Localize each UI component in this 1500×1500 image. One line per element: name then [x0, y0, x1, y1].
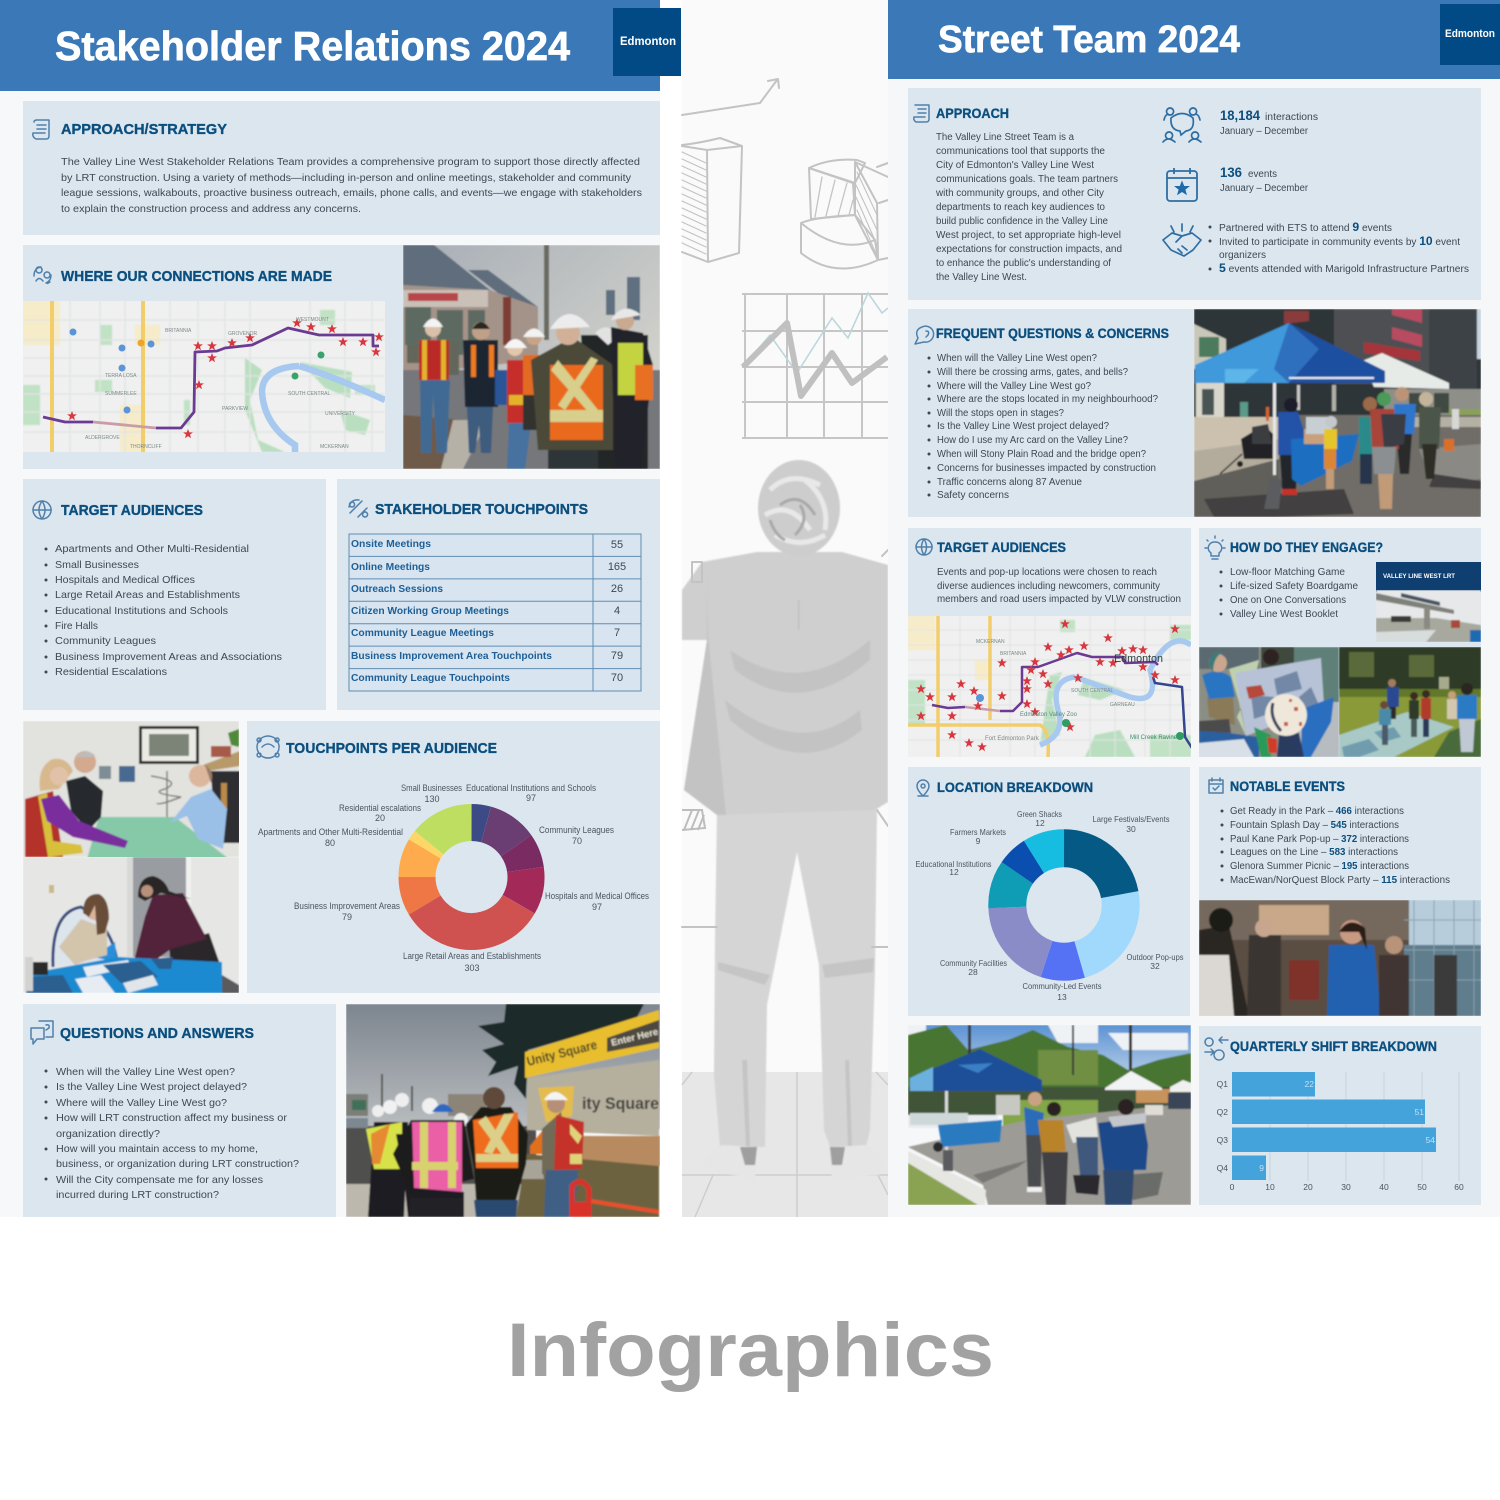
heading: QUARTERLY SHIFT BREAKDOWN — [1230, 1038, 1437, 1054]
donut labels: Community Leagues — [539, 825, 614, 835]
questions list: Traffic concerns along 87 Avenue — [937, 477, 1082, 488]
question list: Will the City compensate me for any losses — [56, 1174, 263, 1186]
hair — [758, 460, 840, 556]
tent canopy — [1195, 323, 1289, 383]
table: Community League Touchpoints — [351, 672, 510, 684]
stat: events — [1220, 164, 1309, 194]
approach text: with community groups, and other City — [935, 188, 1104, 199]
icon: document — [33, 120, 49, 139]
donut labels: 32 — [1150, 961, 1160, 971]
donut labels: 30 — [1126, 824, 1136, 834]
donut labels: 13 — [1057, 992, 1067, 1002]
icon: calendar star — [1167, 168, 1197, 201]
engagement list: One on One Conversations — [1230, 595, 1346, 606]
photo: crew in hard hats on sidewalk — [403, 245, 660, 469]
map: event locations: Mill Creek Ravine — [1130, 735, 1178, 741]
approach text: to enhance the public's understanding of — [936, 258, 1111, 269]
table: Citizen Working Group Meetings — [351, 605, 509, 617]
businessman seen from behind — [682, 460, 888, 1180]
panel: touchpoints per audience — [247, 721, 660, 993]
photo: crew at Unity Square: Unity Square — [525, 1037, 599, 1069]
audience list: Fire Halls — [55, 620, 98, 632]
donut labels: Community Facilities — [940, 958, 1007, 968]
map: event locations: GARNEAU — [1110, 702, 1135, 708]
questions list: Where are the stops located in my neighbourhood? — [937, 394, 1158, 405]
sketch: rising arrow — [682, 79, 779, 115]
stroller — [1241, 425, 1273, 459]
bar chart: shifts per quarter: 30 — [1341, 1182, 1351, 1192]
events list: Fountain Splash Day – 545 interactions — [1230, 820, 1399, 831]
body text: to explain the construction process and address any concerns. — [61, 203, 361, 215]
icon: speech bubble — [915, 326, 934, 344]
table: Community League Meetings — [351, 627, 494, 639]
bar chart: shifts per quarter: 10 — [1265, 1182, 1275, 1192]
donut labels: 20 — [375, 813, 385, 823]
map: stakeholder connections: UNIVERSITY — [325, 411, 356, 417]
icon: calendar check — [1209, 778, 1223, 793]
approach text: City of Edmonton's Valley Line West — [936, 160, 1094, 171]
table: 55 — [611, 539, 623, 551]
body text: by LRT construction. Using a variety of methods—including in-person and online meetings, stakeholder and community — [61, 172, 632, 184]
donut labels: Small Businesses — [401, 783, 462, 793]
sketch: 3D bar — [682, 138, 742, 262]
heading: QUESTIONS AND ANSWERS — [60, 1025, 254, 1042]
approach text — [935, 132, 1122, 283]
partnership bullets: 5 events attended with Marigold Infrastructure Partners — [1219, 261, 1469, 275]
icon: handshake circle — [257, 736, 279, 758]
map: stakeholder connections: THORNCLIFF — [130, 444, 162, 450]
donut labels: Farmers Markets — [950, 827, 1006, 837]
bar chart: shifts per quarter: 22 — [1305, 1079, 1314, 1089]
donut labels: 97 — [526, 793, 536, 803]
engagement list: Low-floor Matching Game — [1230, 567, 1345, 578]
donut labels: 130 — [424, 794, 440, 804]
donut labels: 80 — [325, 838, 335, 848]
question list: Is the Valley Line West project delayed? — [56, 1081, 247, 1093]
icon: shift rotation — [1205, 1037, 1228, 1060]
bar chart: shifts per quarter: 50 — [1417, 1182, 1427, 1192]
left infographic background — [0, 91, 660, 1217]
photo: outdoor event with tent and stroller — [908, 1025, 1191, 1205]
panel: approach / strategy — [23, 101, 660, 235]
blue table — [1291, 434, 1359, 486]
map: stakeholder connections: MCKERNAN — [320, 444, 349, 450]
questions list: Where will the Valley Line West go? — [937, 381, 1091, 392]
table: 79 — [611, 650, 623, 662]
questions list: When will the Valley Line West open? — [937, 353, 1097, 364]
question list: How will you maintain access to my home, — [56, 1143, 258, 1155]
questions list: Safety concerns — [937, 490, 1009, 501]
questions list — [929, 353, 1158, 501]
stat: events: 136 — [1220, 164, 1242, 180]
stat: interactions — [1220, 107, 1318, 137]
panel: target audiences — [23, 479, 326, 710]
body text: The Valley Line West Stakeholder Relations Team provides a comprehensive program to support those directly affected — [61, 156, 640, 168]
map: event locations — [908, 616, 1192, 757]
header: Stakeholder Relations — [0, 0, 660, 91]
body text — [61, 156, 642, 215]
heading: TARGET AUDIENCES — [937, 539, 1066, 555]
map: stakeholder connections: ALDERGROVE — [85, 435, 120, 441]
map: stakeholder connections: BRITANNIA — [165, 328, 192, 334]
map: stakeholder connections: SUMMERLEE — [105, 391, 137, 397]
donut labels — [258, 783, 649, 973]
table: 26 — [611, 583, 623, 595]
question list: business, or organization during LRT construction? — [56, 1158, 299, 1170]
heading: HOW DO THEY ENGAGE? — [1230, 539, 1383, 555]
questions list: Will the stops open in stages? — [937, 408, 1064, 419]
description: members and road users impacted by VLW construction — [937, 594, 1181, 605]
right infographic background — [888, 79, 1500, 1217]
photo: consultation at blue table — [23, 857, 239, 993]
map: event locations: Edmonton — [1114, 653, 1163, 665]
donut labels: Educational Institutions — [916, 859, 992, 869]
panel: stakeholder touchpoints — [337, 479, 660, 710]
table: 4 — [614, 605, 620, 617]
donut labels: 12 — [949, 867, 959, 877]
heading: APPROACH/STRATEGY — [61, 121, 227, 138]
title: Street Team 2024: Street Team 2024 — [938, 19, 1240, 61]
panel: quarterly shift breakdown — [1199, 1026, 1481, 1205]
audience list: Large Retail Areas and Establishments — [55, 589, 240, 601]
map: event locations: SOUTH CENTRAL — [1071, 688, 1113, 694]
engagement list — [1221, 567, 1358, 620]
photo: safety matching game — [1199, 647, 1339, 757]
panel: frequent questions and concerns — [908, 309, 1194, 517]
panel: notable events — [1199, 767, 1481, 1016]
booklet cover: VALLEY LINE WEST LRT — [1383, 573, 1455, 580]
donut labels: 12 — [1035, 818, 1045, 828]
approach text: build public confidence in the Valley Line — [936, 216, 1108, 227]
map: stakeholder connections: SOUTH CENTRAL — [288, 391, 330, 397]
photo: event attendees with street team — [1199, 900, 1481, 1016]
heading: FREQUENT QUESTIONS & CONCERNS — [936, 325, 1169, 341]
bar chart: shifts per quarter: 51 — [1415, 1107, 1424, 1117]
bar chart: shifts per quarter: 0 — [1230, 1182, 1235, 1192]
bar chart: shifts per quarter: Q4 — [1217, 1163, 1228, 1173]
donut labels: Hospitals and Medical Offices — [545, 891, 649, 901]
jacket — [682, 552, 888, 815]
table: Outreach Sessions — [351, 583, 443, 595]
table: Business Improvement Area Touchpoints — [351, 650, 552, 662]
icon: globe with people — [916, 539, 932, 555]
approach text: communications tool that supports the — [936, 146, 1105, 157]
questions list: Will there be crossing arms, gates, and bells? — [937, 367, 1128, 378]
heading: NOTABLE EVENTS — [1230, 778, 1345, 794]
bar chart: shifts per quarter: 20 — [1303, 1182, 1313, 1192]
table: 165 — [608, 561, 626, 573]
table: 70 — [611, 672, 623, 684]
header: Street Team — [888, 0, 1500, 79]
table: 7 — [614, 627, 620, 639]
bar chart: shifts per quarter: 54 — [1426, 1135, 1435, 1145]
heading: LOCATION BREAKDOWN — [937, 779, 1093, 795]
logo: Edmonton (left) — [613, 8, 681, 76]
audience list: Apartments and Other Multi-Residential — [55, 543, 249, 555]
stat: interactions: interactions — [1265, 112, 1318, 123]
logo: Edmonton (right) — [1440, 4, 1500, 65]
donut labels: 70 — [572, 836, 582, 846]
icon: connected people — [34, 267, 51, 284]
sketch fragments around figure — [682, 550, 888, 947]
map: event locations: BRITANNIA — [1000, 651, 1027, 657]
events list: Glenora Summer Picnic – 195 interactions — [1230, 861, 1409, 872]
trousers — [714, 810, 877, 1147]
bar chart: shifts per quarter: 9 — [1259, 1163, 1264, 1173]
donut labels: Educational Institutions and Schools — [466, 783, 596, 793]
photo: crew at Unity Square: Enter Here — [610, 1027, 659, 1049]
sketch: line graph on grid — [742, 293, 888, 438]
heading: STAKEHOLDER TOUCHPOINTS — [375, 501, 588, 518]
icon: handshake — [1163, 224, 1201, 256]
shoes — [702, 1145, 757, 1180]
questions list: Is the Valley Line West project delayed? — [937, 421, 1109, 432]
partnership bullets: Partnered with ETS to attend 9 events — [1219, 220, 1392, 234]
icon: handshake nodes — [349, 500, 368, 517]
map: event locations: MCKERNAN — [976, 639, 1005, 645]
audience list: Hospitals and Medical Offices — [55, 574, 195, 586]
photo: crew at Unity Square — [346, 1004, 660, 1217]
events list: Paul Kane Park Pop-up – 372 interactions — [1230, 834, 1409, 845]
donut labels: 79 — [342, 912, 352, 922]
donut labels — [916, 809, 1184, 1002]
logo: Edmonton (left): Edmonton — [620, 34, 676, 48]
stat: events: events — [1248, 169, 1277, 180]
donut chart: location breakdown — [985, 826, 1143, 984]
photo: street team blue tent — [1194, 309, 1481, 517]
icon: people network — [1163, 108, 1201, 142]
partnership bullets: Invited to participate in community events by 10 event — [1219, 234, 1460, 248]
bar chart: shifts per quarter: 60 — [1454, 1182, 1464, 1192]
bar chart: shifts per quarter: Q2 — [1217, 1107, 1228, 1117]
approach text: The Valley Line Street Team is a — [936, 132, 1074, 143]
panel: street team approach — [908, 88, 1481, 300]
icon: document — [914, 105, 929, 122]
map: stakeholder connections: PARKVIEW — [222, 406, 248, 412]
question list: How will LRT construction affect my business or — [56, 1112, 288, 1124]
question list: When will the Valley Line West open? — [56, 1066, 235, 1078]
table: Online Meetings — [351, 561, 430, 573]
audience list: Business Improvement Areas and Associations — [55, 651, 282, 663]
donut chart: touchpoints per audience — [395, 800, 548, 954]
table — [349, 534, 641, 691]
events list: Leagues on the Line – 583 interactions — [1230, 847, 1398, 858]
sketch: hatched block — [682, 810, 705, 830]
panel: target audiences (street team) — [908, 528, 1192, 757]
approach text: communications goals. The team partners — [936, 174, 1118, 185]
sketch: 3D pie chart — [801, 160, 888, 269]
description: diverse audiences including newcomers, community — [937, 581, 1160, 592]
approach text: the Valley Line West. — [936, 272, 1027, 283]
child — [1324, 429, 1337, 449]
photo: life-sized safety boardgame — [1339, 647, 1481, 757]
donut labels: Residential escalations — [339, 803, 421, 813]
icon: globe with people — [33, 501, 51, 519]
background workers — [372, 1105, 384, 1117]
donut labels: Large Retail Areas and Establishments — [403, 951, 541, 961]
question list: Where will the Valley Line West go? — [56, 1097, 227, 1109]
audience list: Residential Escalations — [55, 666, 167, 678]
events list — [1222, 806, 1450, 886]
panel: how do they engage — [1199, 528, 1481, 757]
floor with tiles — [682, 1072, 888, 1217]
bar chart: shifts per quarter: Q1 — [1217, 1079, 1228, 1089]
panel: questions and answers — [23, 1004, 336, 1217]
panel: location breakdown — [908, 767, 1190, 1016]
caption: Infographics: Infographics — [507, 1308, 994, 1393]
map: event locations: Edmonton Valley Zoo — [1020, 712, 1078, 718]
icon: speech bubbles — [31, 1021, 53, 1044]
bar chart: shifts per quarter: Q3 — [1217, 1135, 1228, 1145]
heading: TOUCHPOINTS PER AUDIENCE — [286, 740, 497, 757]
engagement list: Valley Line West Booklet — [1230, 609, 1338, 620]
audience list: Community Leagues — [55, 635, 156, 647]
table: Onsite Meetings — [351, 538, 431, 550]
description: Events and pop-up locations were chosen to reach — [937, 567, 1157, 578]
question list: incurred during LRT construction? — [56, 1189, 219, 1201]
partnership bullets — [1210, 220, 1469, 275]
approach text: West project, to set appropriate high-level — [936, 230, 1121, 241]
description — [937, 567, 1181, 605]
approach text: expectations for construction impacts, and — [936, 244, 1122, 255]
map: stakeholder connections — [23, 301, 385, 452]
audience list — [46, 543, 282, 678]
events list: Get Ready in the Park – 466 interactions — [1230, 806, 1404, 817]
question list: organization directly? — [56, 1128, 160, 1140]
title: Stakeholder Relations 2024: Stakeholder Relations 2024 — [55, 23, 570, 69]
engagement list: Life-sized Safety Boardgame — [1230, 581, 1358, 592]
map: stakeholder connections: WESTMOUNT — [296, 317, 329, 323]
map: stakeholder connections: TERRA LOSA — [105, 373, 137, 379]
donut labels: 303 — [464, 963, 480, 973]
bar chart: shifts per quarter — [1217, 1072, 1464, 1192]
stat: interactions: January – December — [1220, 126, 1309, 137]
body text: league sessions, walkabouts, proactive business outreach, emails, phone calls, and events—we engage with stakeholders — [61, 187, 642, 199]
approach text: departments to reach key audiences to — [936, 202, 1105, 213]
bar chart: shifts per quarter: 40 — [1379, 1182, 1389, 1192]
questions list: When will Stony Plain Road and the bridge open? — [937, 449, 1146, 460]
audience list: Small Businesses — [55, 559, 139, 571]
icon: lightbulb — [1205, 536, 1225, 559]
panel: where our connections are made — [23, 245, 403, 469]
donut labels: Large Festivals/Events — [1092, 814, 1170, 824]
stat: interactions: 18,184 — [1220, 107, 1260, 123]
donut labels: Community-Led Events — [1022, 981, 1102, 991]
donut labels: 28 — [968, 967, 978, 977]
heading: APPROACH — [936, 105, 1009, 121]
donut labels: Green Shacks — [1017, 809, 1062, 819]
map: stakeholder connections: GROVENOR — [228, 331, 258, 337]
donut labels: Outdoor Pop-ups — [1126, 952, 1184, 962]
heading: WHERE OUR CONNECTIONS ARE MADE — [61, 268, 332, 285]
donut labels: Business Improvement Areas — [294, 901, 400, 911]
centre column: sketches and businessman — [682, 0, 888, 1217]
icon: location pin — [917, 780, 929, 796]
heading: TARGET AUDIENCES — [61, 502, 203, 519]
staff in blue jacket — [1278, 412, 1306, 455]
questions list: Concerns for businesses impacted by construction — [937, 463, 1156, 474]
donut labels: 9 — [976, 836, 981, 846]
booklet cover — [1376, 562, 1481, 642]
visitors — [1359, 417, 1372, 459]
stat: events: January – December — [1220, 183, 1309, 194]
donut labels: Apartments and Other Multi-Residential — [258, 827, 403, 837]
question list — [46, 1066, 299, 1201]
questions list: How do I use my Arc card on the Valley Line? — [937, 435, 1128, 446]
audience list: Educational Institutions and Schools — [55, 605, 228, 617]
stacked bag by pole — [1264, 479, 1282, 509]
logo: Edmonton (right): Edmonton — [1445, 28, 1495, 40]
donut labels: 97 — [592, 902, 602, 912]
events list: MacEwan/NorQuest Block Party – 115 interactions — [1230, 875, 1450, 886]
map: event locations: Fort Edmonton Park — [985, 736, 1040, 742]
partnership bullets: organizers — [1219, 250, 1266, 261]
photo: meeting at green table — [23, 721, 239, 857]
